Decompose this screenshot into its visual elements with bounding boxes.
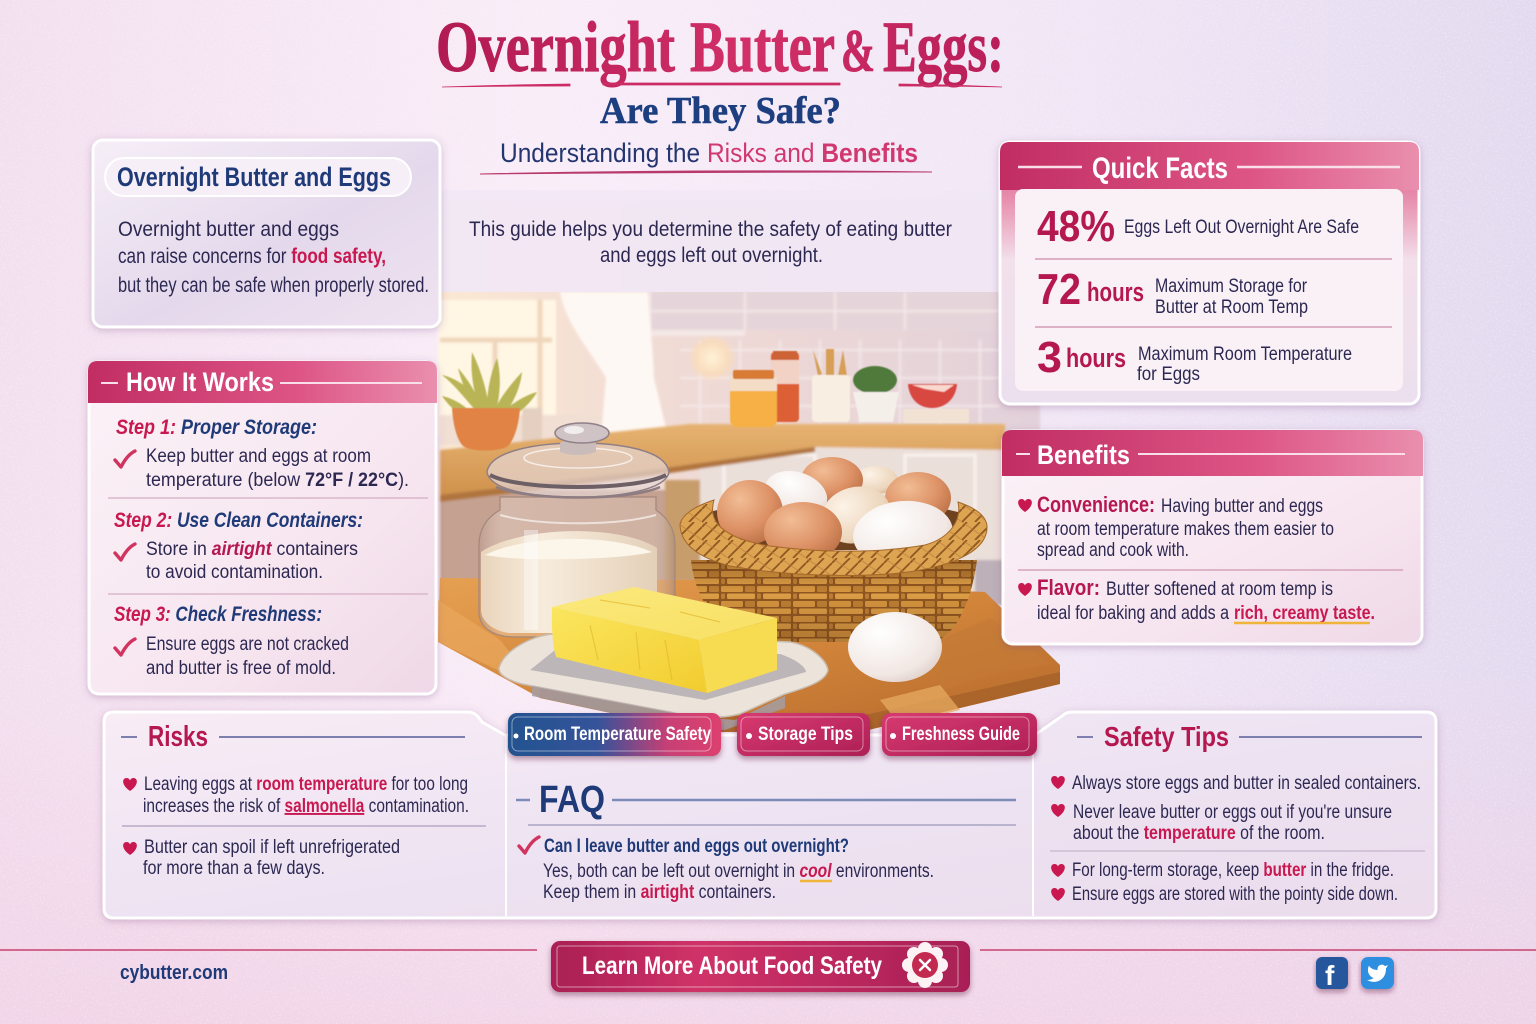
main title (436, 7, 1004, 87)
benefit: convenience: at room temperature makes them easier to (1037, 519, 1334, 540)
benefit: flavor: ideal for baking and adds a (1037, 603, 1229, 624)
panel: how it works (88, 361, 437, 694)
faq question and answer: Keep them in airtight containers. (543, 882, 776, 903)
glass jar with flour (479, 423, 675, 637)
icon: seal badge (902, 942, 948, 988)
butter block (552, 587, 777, 693)
main title: Overnight (436, 7, 675, 87)
icon: twitter (1361, 957, 1394, 989)
fact: 72 hours: 72 (1037, 265, 1081, 314)
header bar: How It Works (126, 367, 274, 397)
tip: unsure temperature: Never leave butter or eggs out if you're unsure (1073, 802, 1392, 823)
tip: pointy side down: Ensure eggs are stored with the pointy side down. (1072, 884, 1398, 905)
faq question and answer: Can I leave butter and eggs out overnight? (544, 836, 849, 857)
tab: storage tips: Storage Tips (758, 724, 853, 745)
tagline: Understanding the Risks and Benefits (500, 138, 918, 168)
curtain (560, 292, 667, 439)
header bar: Quick Facts (1092, 152, 1228, 185)
heading pill: Overnight Butter and Eggs (117, 162, 391, 192)
risk: butter spoilage (123, 837, 400, 879)
step 2: Store in airtight containers (146, 539, 358, 560)
benefit: convenience: Convenience: (1037, 492, 1155, 517)
fact: 3 hours: 3 (1037, 333, 1062, 382)
panel: faq (516, 779, 1016, 903)
fact: 3 hours: Maximum Room Temperature (1138, 344, 1352, 365)
risk: butter spoilage: Butter can spoil if left unrefrigerated (144, 837, 400, 858)
step 2: to avoid contamination. (146, 562, 323, 583)
step 1: temperature (below 72°F / 22°C). (146, 470, 409, 491)
subtitle question: Are They Safe? (600, 90, 841, 132)
footer site link: cybutter.com (120, 962, 228, 984)
header bar: Benefits (1037, 440, 1130, 470)
intro body text: but they can be safe when properly stored. (118, 274, 429, 297)
fact: 48 percent (1037, 202, 1359, 251)
tip: sealed containers: Always store eggs and butter in sealed containers. (1072, 773, 1421, 794)
panel: benefits (1002, 430, 1423, 644)
tab: freshness guide: Freshness Guide (902, 724, 1020, 745)
counter and cabinets (440, 424, 1005, 605)
heading pill (105, 158, 411, 196)
fact: 72 hours: hours (1087, 277, 1144, 307)
benefit: flavor (1018, 575, 1375, 624)
benefit: flavor: Flavor: (1037, 575, 1100, 600)
tip: unsure temperature (1051, 802, 1392, 844)
faq question and answer (519, 836, 934, 903)
button: learn more about food safety (551, 941, 970, 992)
title block (436, 7, 1004, 174)
tip: unsure temperature: about the temperature of the room. (1073, 823, 1325, 844)
faq question and answer: Yes, both can be left out overnight in cool environments. (543, 861, 934, 882)
fact: 3 hours: hours (1066, 343, 1126, 373)
step 3: and butter is free of mold. (146, 658, 336, 679)
benefit: flavor: Butter softened at room temp is (1106, 579, 1333, 600)
safety tips heading: Safety Tips (1104, 721, 1229, 752)
intro body text: Overnight butter and eggs (118, 218, 339, 241)
tab: room temperature safety (508, 713, 721, 756)
step 3: Ensure eggs are not cracked (146, 634, 349, 655)
intro band behind guide text (440, 190, 1000, 292)
header bar (1002, 430, 1423, 476)
fact: 3 hours (1037, 333, 1352, 385)
panel: safety tips (1050, 721, 1425, 905)
fact: 48 percent: Eggs Left Out Overnight Are Safe (1124, 217, 1359, 238)
tagline underline (480, 171, 932, 174)
panel: quick facts (1000, 142, 1419, 404)
step 3: Step 3: Check Freshness: (114, 603, 322, 626)
fact: 72 hours: Butter at Room Temp (1155, 297, 1308, 318)
fact: 72 hours (1037, 265, 1308, 318)
guide text: This guide helps you determine the safety of eating butter (469, 218, 952, 241)
step 2: Step 2: Use Clean Containers: (114, 509, 363, 532)
fact: 72 hours: Maximum Storage for (1155, 276, 1308, 297)
cutting board (438, 578, 1060, 732)
fact: 48 percent: 48% (1037, 202, 1115, 251)
kitchen shelf items (730, 349, 969, 427)
benefit: flavor: rich, creamy taste. (1234, 603, 1375, 624)
tab: room temperature safety: Room Temperature Safety (524, 724, 711, 745)
benefit: convenience: Having butter and eggs (1161, 496, 1323, 517)
step 3 (114, 603, 349, 679)
footer rules (0, 949, 1536, 951)
kitchen wall and backdrop (438, 200, 1040, 500)
header bar (1000, 142, 1419, 190)
main title: & (841, 18, 875, 84)
loose egg (848, 612, 942, 682)
butter dish (499, 634, 828, 730)
step 1 (115, 416, 409, 491)
potted plant (442, 352, 537, 450)
guide text (469, 218, 952, 267)
tip: long-term storage: For long-term storage, keep butter in the fridge. (1072, 860, 1394, 881)
illustration: kitchen scene with butter and eggs (438, 200, 1060, 732)
risk: room temperature (123, 774, 469, 817)
guide text: and eggs left out overnight. (600, 244, 823, 267)
header bar (88, 361, 437, 403)
button: learn more about food safety: Learn More About Food Safety (582, 952, 882, 980)
risk: room temperature: Leaving eggs at room temperature for too long (144, 774, 468, 795)
risk: room temperature: increases the risk of salmonella contamination. (143, 796, 469, 817)
step 1: Step 1: Proper Storage: (116, 416, 317, 439)
panel: lower band container (104, 712, 1436, 918)
benefit: convenience (1018, 492, 1334, 561)
tab: freshness guide (882, 713, 1037, 756)
icon: facebook (1316, 957, 1348, 991)
main title: Eggs: (883, 7, 1004, 87)
panel: risks (121, 721, 486, 879)
step 1: Keep butter and eggs at room (146, 446, 371, 467)
icon: facebook: f (1325, 960, 1335, 991)
panel: overnight butter and eggs (93, 140, 440, 327)
eggs in basket (717, 457, 956, 571)
intro body text (118, 218, 429, 297)
risk: butter spoilage: for more than a few days. (143, 858, 325, 879)
main title: Butter (690, 7, 835, 87)
benefit: convenience: spread and cook with. (1037, 540, 1189, 561)
intro body text: can raise concerns for food safety, (118, 245, 386, 268)
fact: 3 hours: for Eggs (1137, 364, 1200, 385)
wicker basket with eggs (680, 457, 987, 642)
title underline (442, 83, 1002, 87)
step 2 (114, 509, 363, 583)
faq heading: FAQ (539, 779, 605, 821)
tab: storage tips (737, 713, 870, 756)
risks heading: Risks (148, 721, 208, 753)
